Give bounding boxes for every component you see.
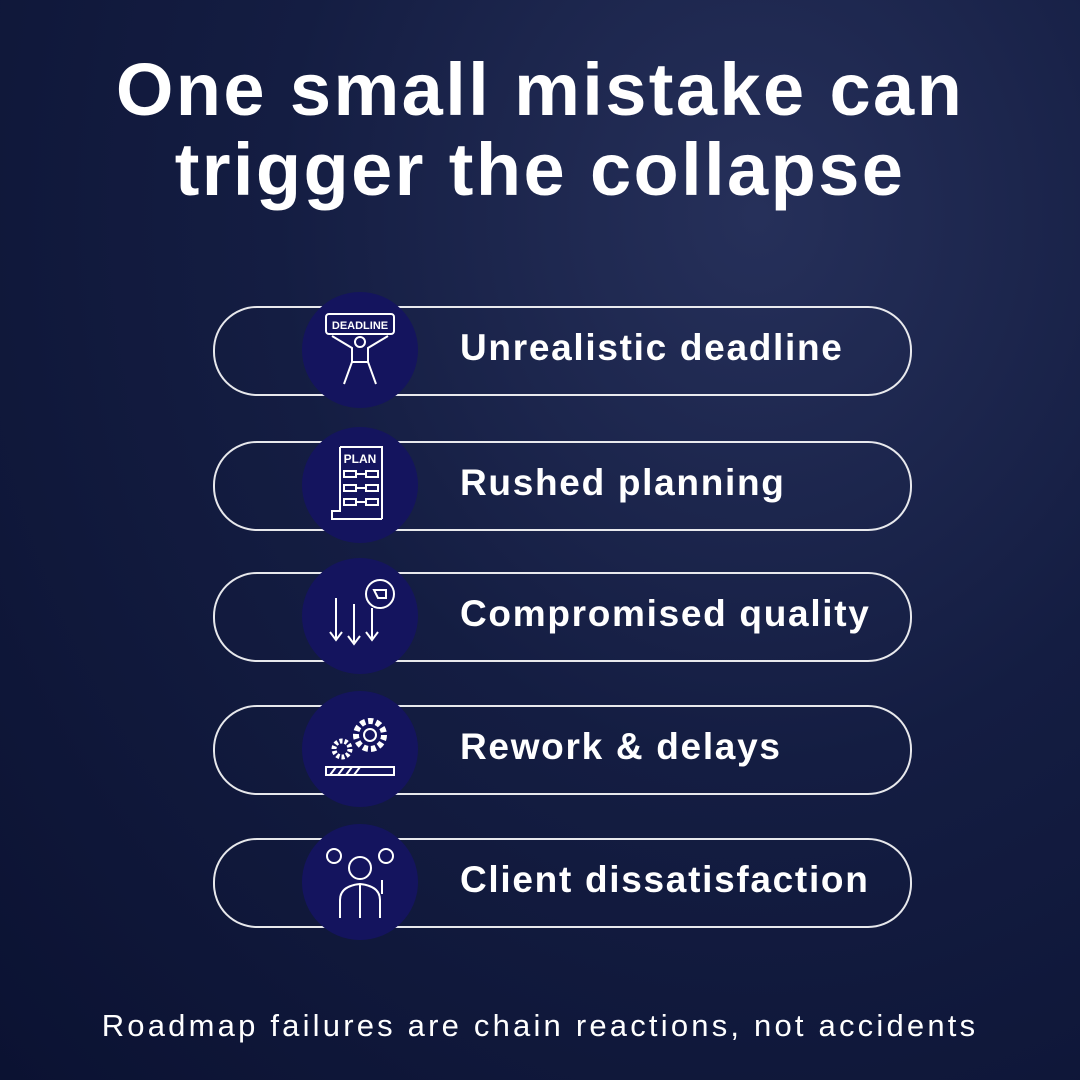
footer text: Roadmap failures are chain reactions, not accidents	[102, 1008, 978, 1043]
icon: quality down	[302, 558, 418, 674]
row: compromised quality: Compromised quality	[460, 593, 871, 634]
row: rushed planning: Rushed planning	[460, 462, 786, 503]
icon: plan	[302, 427, 418, 543]
row: unrealistic deadline	[213, 292, 912, 408]
row: unrealistic deadline: Unrealistic deadline	[460, 327, 844, 368]
row: rushed planning	[213, 427, 912, 543]
icon: deadline	[302, 292, 418, 408]
row: rework & delays: Rework & delays	[460, 726, 782, 767]
row: rework & delays	[213, 691, 912, 807]
title: trigger the collapse	[175, 128, 905, 211]
icon: gears	[302, 691, 418, 807]
title: One small mistake can	[116, 48, 964, 131]
icon: client	[302, 824, 418, 940]
row: compromised quality	[213, 558, 912, 674]
icon: plan: PLAN	[344, 452, 376, 466]
row: client dissatisfaction	[213, 824, 912, 940]
row: client dissatisfaction: Client dissatisfaction	[460, 859, 870, 900]
title	[116, 48, 964, 211]
icon: deadline: DEADLINE	[332, 320, 388, 332]
